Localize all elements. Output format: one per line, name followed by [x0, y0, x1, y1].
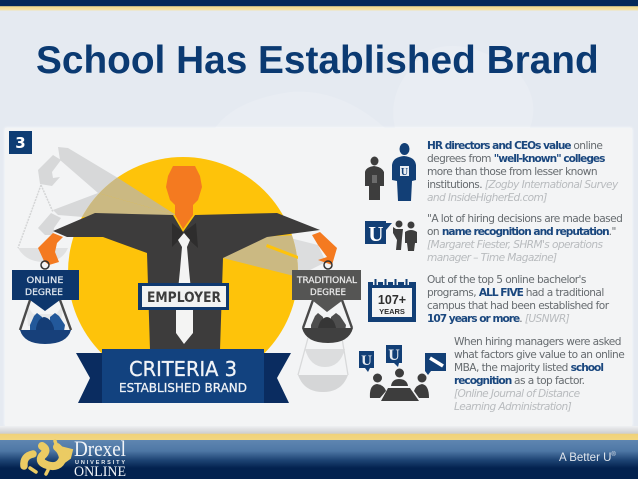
icon: two people with U badge — [365, 143, 416, 201]
label: online degree: ONLINE — [26, 276, 64, 286]
text: HR directors: HR directors and CEOs value online — [427, 140, 602, 152]
tie — [176, 233, 193, 344]
text: HR directors: institutions. [Zogby International Survey — [427, 179, 618, 191]
footer logo — [20, 436, 126, 479]
icon: calendar 107+ years: 107+ — [378, 293, 406, 307]
icon: meeting table with speech bubbles: U — [361, 353, 372, 369]
panel: infographic — [5, 128, 632, 426]
footer logo: UNIVERSITY — [75, 460, 125, 466]
employer label — [138, 283, 229, 310]
footer stripe — [0, 426, 638, 440]
title: School Has Established Brand — [36, 39, 599, 82]
text: top 5 programs: 107 years or more. [USNWR] — [427, 313, 569, 325]
text: hiring decisions quote: manager – Time Magazine] — [427, 252, 557, 264]
hand right — [312, 232, 337, 265]
text: top 5 programs: campus that had been established for — [427, 300, 609, 312]
tagline: A Better U® — [559, 452, 616, 464]
text: hiring managers: When hiring managers were asked — [454, 336, 621, 348]
text: hiring decisions quote: [Margaret Fiester, SHRM's operations — [427, 239, 602, 251]
text: HR directors: and InsideHigherEd.com] — [427, 192, 547, 204]
ghost highlight stripe — [266, 244, 298, 259]
icon: two people with U badge: U — [401, 167, 408, 178]
text: hiring managers: what factors give value to an online — [454, 349, 624, 361]
text: hiring managers: recognition as a top factor. — [454, 375, 584, 387]
top banner — [0, 0, 638, 11]
collar — [172, 223, 183, 247]
text: hiring decisions quote: on name recognition and reputation." — [427, 226, 616, 238]
text: HR directors: more than those from lesser known — [427, 166, 597, 178]
badge: number 3: 3 — [15, 134, 26, 152]
text: HR directors: degrees from "well-known" colleges — [427, 153, 604, 165]
text: top 5 programs — [427, 274, 610, 325]
badge: number 3 — [9, 131, 32, 154]
label: online degree — [12, 270, 79, 311]
illustration: employer balancing degrees — [9, 131, 446, 403]
footer blue band — [0, 440, 638, 479]
dragon — [24, 441, 72, 474]
text: hiring decisions quote — [427, 213, 622, 264]
text: hiring managers: Learning Administration] — [454, 401, 571, 413]
hand left — [38, 233, 63, 265]
yellow circle — [68, 157, 298, 387]
ribbon: criteria 3: CRITERIA 3 — [129, 357, 237, 381]
figure: employer — [38, 166, 337, 350]
icon: meeting table with speech bubbles — [359, 345, 446, 401]
icon: calendar 107+ years — [368, 279, 416, 322]
employer label: EMPLOYER — [147, 290, 221, 306]
ghost arm overlays on circle — [82, 178, 298, 276]
ribbon: criteria 3 — [76, 349, 291, 403]
scale: traditional degree — [292, 261, 361, 343]
label: traditional degree — [292, 270, 361, 312]
head — [166, 166, 202, 229]
label: traditional degree: TRADITIONAL — [296, 276, 357, 286]
ghost arm and scale, right — [290, 238, 348, 392]
icon: calendar 107+ years: YEARS — [379, 307, 405, 316]
suit — [53, 213, 320, 350]
text: top 5 programs: programs, ALL FIVE had a traditional — [427, 287, 604, 299]
icon: meeting table with speech bubbles: U — [388, 347, 400, 364]
text: hiring managers — [454, 336, 624, 413]
text: hiring managers: [Online Journal of Distance — [454, 388, 580, 400]
scale: online degree — [12, 261, 79, 344]
text: hiring decisions quote: "A lot of hiring decisions are made based — [427, 213, 622, 225]
text: HR directors — [427, 140, 618, 204]
icon: U speech bubble and people: U — [368, 222, 384, 246]
footer logo: Drexel — [74, 436, 126, 461]
label: online degree: DEGREE — [25, 288, 63, 298]
label: traditional degree: DEGREE — [310, 288, 346, 298]
background watermark — [0, 0, 638, 128]
ribbon: criteria 3: ESTABLISHED BRAND — [119, 380, 247, 395]
ghost arm and scale, left — [18, 147, 176, 262]
icon: U speech bubble and people — [365, 220, 417, 251]
text: top 5 programs: Out of the top 5 online bachelor's — [427, 274, 586, 286]
text: hiring managers: MBA, the majority listed school — [454, 362, 603, 374]
